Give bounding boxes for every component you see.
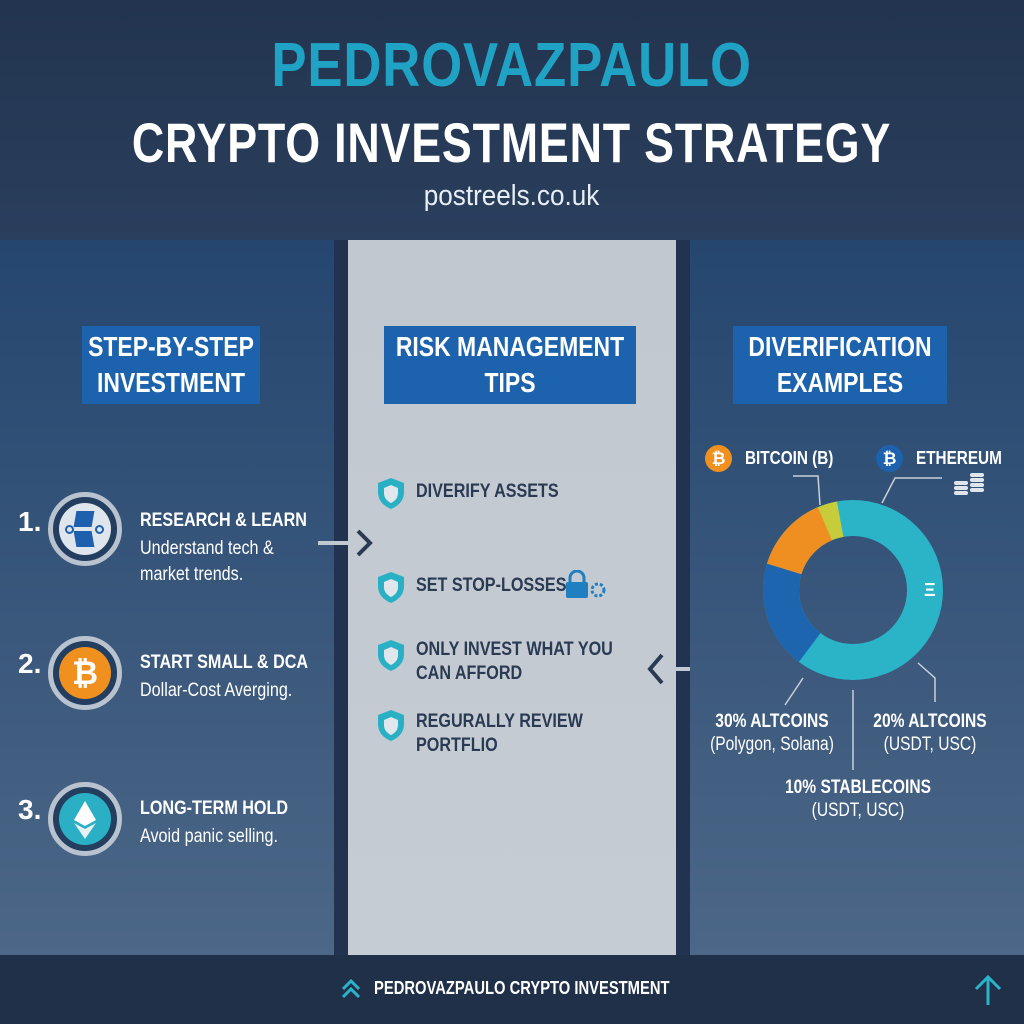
label: 10% stablecoins [785,777,931,821]
heading: diversification: EXAMPLES [777,367,903,398]
heading: diversification [733,326,947,404]
label: 20% altcoins: (USDT, USC) [884,734,976,755]
tip 1: DIVERIFY ASSETS [416,481,559,502]
footer logo [342,979,360,998]
label: 10% stablecoins: 10% STABLECOINS [785,777,931,798]
title line 1: PEDROVAZPAULO [272,31,752,100]
heading: risk management: RISK MANAGEMENT [396,331,624,362]
step 1: RESEARCH & LEARN [140,510,307,531]
label: 20% altcoins: 20% ALTCOINS [873,711,987,732]
step 3 [18,782,288,856]
panel: step-by-step: market trends. [140,564,243,585]
legend: bitcoin: ₿ [712,449,725,468]
step 1: Understand tech & [140,538,274,559]
header [0,0,1024,240]
step 3: LONG-TERM HOLD [140,798,288,819]
title line 2: CRYPTO INVESTMENT STRATEGY [132,111,892,174]
subtitle url: postreels.co.uk [424,180,600,212]
donut chart [762,475,943,770]
label: 20% altcoins [873,711,987,755]
legend: bitcoin: BITCOIN (B) [745,448,833,468]
panel: risk management [348,240,676,955]
icon: lock gear [566,570,606,598]
step 3: 3. [18,794,41,825]
heading: diversification: DIVERIFICATION [748,331,932,362]
footer text: PEDROVAZPAULO CRYPTO INVESTMENT [374,978,670,998]
arrow: left pointing [648,654,690,684]
legend: bitcoin [705,445,833,472]
icon: coins [954,473,984,495]
label: 30% altcoins: (Polygon, Solana) [710,734,834,755]
icon: blocks [48,492,122,566]
tip 3 [378,639,613,684]
tip 2: SET STOP-LOSSES [416,575,566,596]
heading: risk management: TIPS [484,367,536,398]
icon: bitcoin [48,636,122,710]
step 2: 2. [18,648,41,679]
label: 10% stablecoins: (USDT, USC) [812,800,904,821]
legend: ethereum: ETHEREUM [916,448,1002,468]
heading: step-by-step [82,326,260,404]
panel: step-by-step [0,240,334,955]
arrow: right pointing [318,530,373,556]
footer [0,955,1024,1024]
heading: step-by-step: STEP-BY-STEP [88,331,254,362]
tip 4 [378,710,583,756]
panel: diversification [690,240,1024,955]
tip 2 [378,570,606,603]
tip 3: CAN AFFORD [416,663,522,684]
tip 4: REGURALLY REVIEW [416,711,583,732]
icon: ethereum [48,782,122,856]
heading: risk management [384,326,636,404]
legend: ethereum [876,445,1002,495]
step 2 [18,636,308,710]
step 1: 1. [18,506,41,537]
donut chart: Ξ [924,580,936,600]
step 2: Dollar-Cost Averging. [140,680,292,701]
icon: up arrow [975,975,1001,1005]
icon: bitcoin: ₿ [72,655,98,691]
tip 1 [378,478,559,509]
step 3: Avoid panic selling. [140,826,278,847]
heading: step-by-step: INVESTMENT [97,367,245,398]
step 2: START SMALL & DCA [140,652,308,673]
step 1 [18,492,307,585]
label: 30% altcoins [710,711,834,755]
legend: ethereum: ₿ [883,449,896,468]
tip 4: PORTFLIO [416,735,498,756]
tip 3: ONLY INVEST WHAT YOU [416,639,613,660]
label: 30% altcoins: 30% ALTCOINS [715,711,829,732]
